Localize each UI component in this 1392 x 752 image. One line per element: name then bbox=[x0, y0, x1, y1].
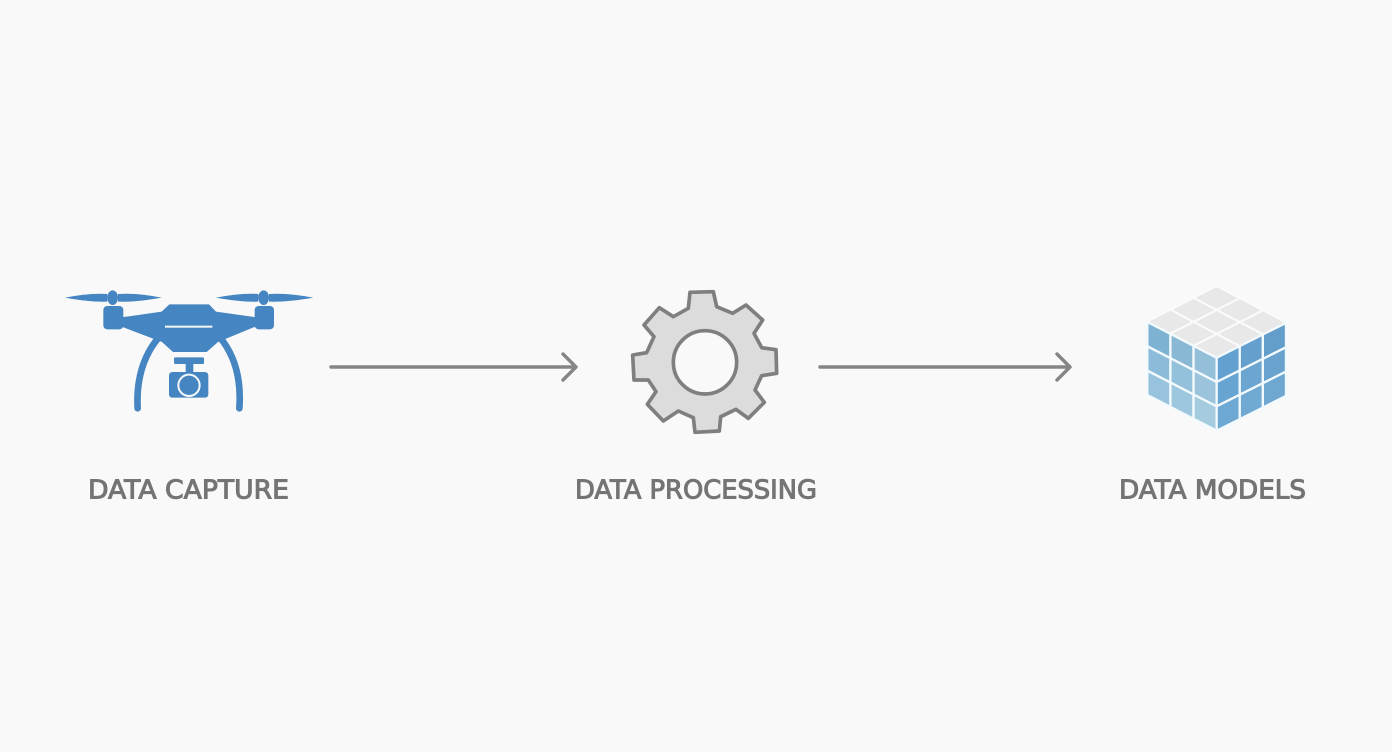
cube right face bbox=[1217, 323, 1286, 431]
cube top face bbox=[1147, 286, 1286, 358]
icon: gear bbox=[633, 292, 777, 432]
icon: drone bbox=[65, 290, 313, 408]
label: data processing: DATA PROCESSING bbox=[575, 476, 817, 506]
label: data models: DATA MODELS bbox=[1119, 476, 1306, 506]
cube left face bbox=[1147, 322, 1217, 431]
label: data capture: DATA CAPTURE bbox=[88, 476, 289, 506]
arrow: capture to processing bbox=[331, 354, 576, 380]
icon: data cube bbox=[1147, 286, 1286, 431]
arrow: processing to models bbox=[820, 354, 1070, 380]
